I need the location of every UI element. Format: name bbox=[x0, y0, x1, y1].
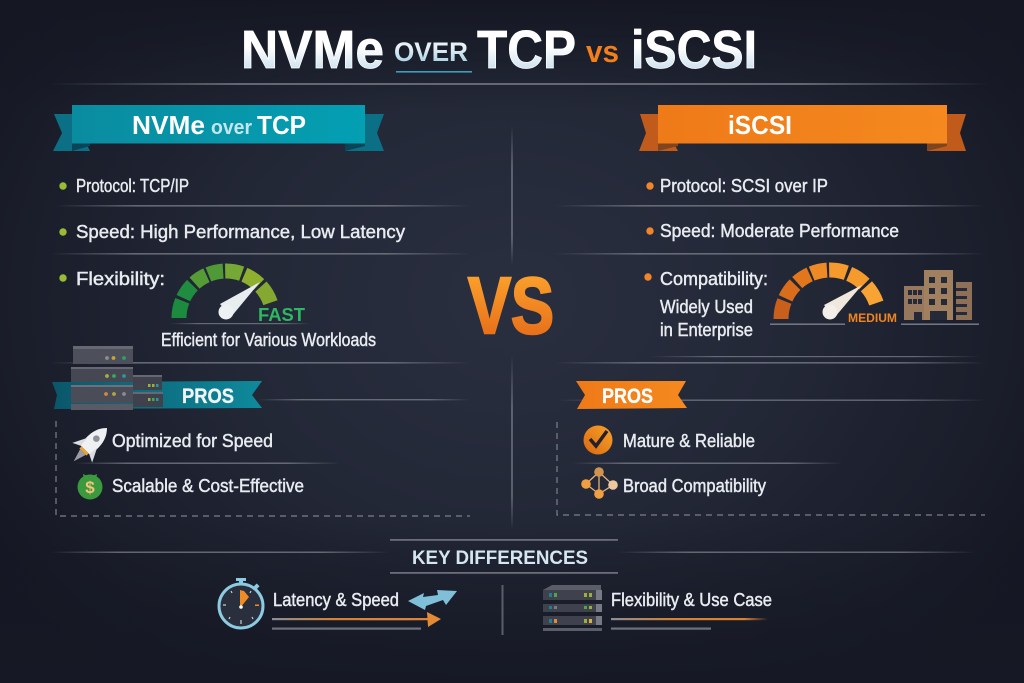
text: flexibility and use case: Flexibility & Use Case bbox=[611, 590, 772, 610]
bullet: protocol: Protocol: SCSI over IP bbox=[660, 176, 828, 196]
bullet: compatibility: Widely Used bbox=[660, 297, 753, 317]
pros banner bbox=[52, 381, 262, 409]
arrow: double bbox=[408, 590, 457, 610]
text: efficient for various workloads: Efficient for Various Workloads bbox=[161, 330, 376, 350]
banner: iSCSI: iSCSI bbox=[728, 110, 792, 140]
title bbox=[241, 20, 757, 80]
text: scalable and cost-effective: Scalable & Cost-Effective bbox=[112, 476, 304, 496]
icon: building bbox=[904, 270, 972, 320]
gauge: medium bbox=[761, 250, 979, 388]
pros box bbox=[557, 422, 985, 515]
icon: network bbox=[581, 467, 618, 499]
text: mature and reliable: Mature & Reliable bbox=[623, 431, 755, 451]
pros banner: PROS bbox=[602, 385, 653, 408]
banner: iSCSI bbox=[639, 105, 966, 151]
title: vs bbox=[586, 34, 619, 69]
gauge: fast bbox=[160, 252, 310, 384]
panel: key differences bbox=[50, 539, 975, 635]
panel: iSCSI bbox=[555, 105, 986, 515]
pros banner: PROS bbox=[182, 385, 234, 408]
text: optimized for speed: Optimized for Speed bbox=[112, 431, 273, 451]
text: broad compatibility: Broad Compatibility bbox=[623, 476, 766, 496]
gauge: medium: MEDIUM bbox=[848, 311, 897, 325]
title: NVMe bbox=[241, 20, 384, 80]
VS badge: VS bbox=[468, 261, 554, 350]
bullet: compatibility: Compatibility: bbox=[660, 269, 768, 289]
title: TCP bbox=[477, 20, 576, 80]
text: latency and speed: Latency & Speed bbox=[273, 590, 399, 610]
panel: NVMe over TCP bbox=[50, 105, 470, 516]
bullet: speed: Speed: Moderate Performance bbox=[660, 221, 899, 241]
pros banner bbox=[576, 381, 687, 409]
heading: KEY DIFFERENCES bbox=[412, 548, 588, 569]
title: iSCSI bbox=[631, 20, 757, 80]
title: OVER bbox=[394, 37, 468, 67]
icon: check bbox=[584, 426, 612, 454]
bullet: speed: Speed: High Performance, Low Latency bbox=[76, 222, 405, 242]
icon: dollar: $ bbox=[85, 478, 95, 497]
icon: server rack bbox=[543, 585, 602, 631]
banner: NVMe over TCP bbox=[53, 105, 384, 151]
icon: stopwatch bbox=[219, 578, 263, 628]
bullet: flexibility: Flexibility: bbox=[76, 269, 165, 289]
bullet: compatibility: in Enterprise bbox=[660, 320, 753, 340]
pros box bbox=[56, 418, 470, 516]
banner: NVMe over TCP: TCP bbox=[257, 110, 306, 140]
banner: NVMe over TCP: NVMe bbox=[132, 110, 205, 140]
icon: servers bbox=[71, 346, 163, 410]
gauge: fast: FAST bbox=[258, 305, 305, 325]
bullet: compatibility bbox=[644, 269, 768, 340]
comparison bars: latency bbox=[272, 612, 441, 630]
banner: NVMe over TCP: over bbox=[211, 117, 252, 139]
center divider bbox=[511, 125, 513, 265]
icon: rocket bbox=[64, 418, 117, 471]
bullet: protocol: Protocol: TCP/IP bbox=[76, 176, 189, 196]
icon: dollar bbox=[78, 474, 102, 500]
comparison bars: flexibility bbox=[611, 618, 768, 630]
